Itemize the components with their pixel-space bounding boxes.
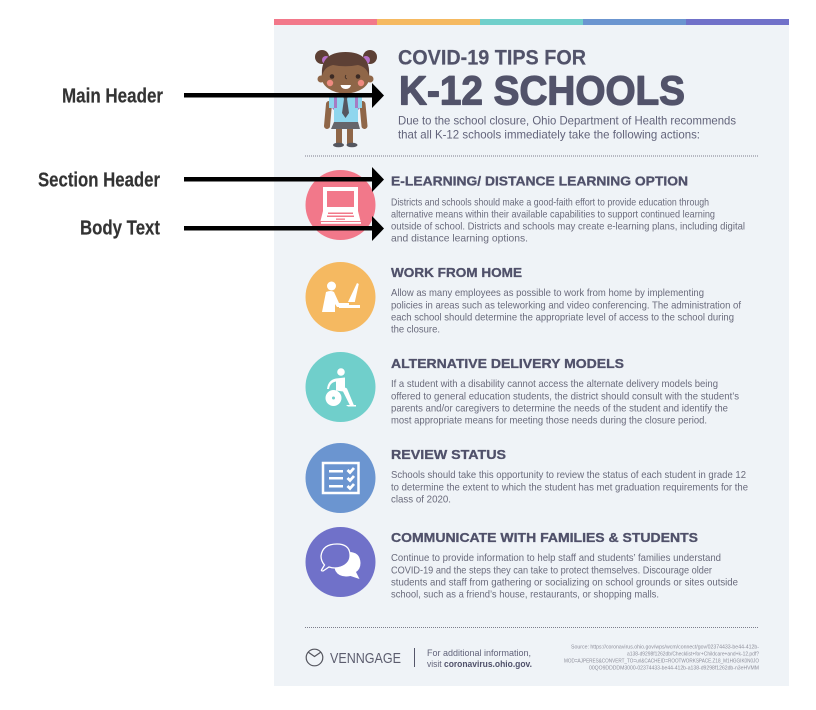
footer: source note: 00QO9DDDDM3000-02374433-be44-412b-a138-d9298f1262db-n3eHVMM	[589, 666, 759, 672]
label: Section Header: Section Header	[38, 168, 160, 192]
footer: additional information: visit coronavirus.ohio.gov.	[427, 659, 532, 670]
body text: COVID-19 and the steps they can take to protect themselves. Discourage older	[391, 564, 712, 576]
main title: K-12 Schools: K-12 SCHOOLS	[399, 68, 685, 114]
body text: parents and/or caregivers to determine the needs of the student and identify the	[391, 402, 728, 414]
footer: source note: a138-d9298f1262db/Checklist+for+Childcare+and+k-12.pdf?	[627, 652, 759, 658]
body text: and distance learning options.	[391, 232, 528, 244]
heading: WORK FROM HOME	[391, 265, 522, 280]
body text: Continue to provide information to help staff and students’ families understand	[391, 552, 721, 564]
body text: most appropriate means for meeting those needs during the closure period.	[391, 414, 707, 426]
footer: Venngage logo	[306, 649, 401, 667]
intro text	[398, 114, 736, 142]
body text: alternative means within their available capabilities to support continued learning	[391, 208, 715, 220]
body text: Districts and schools should make a good-faith effort to provide education through	[391, 196, 709, 208]
body text: the closure.	[391, 324, 440, 336]
section: review status	[306, 443, 748, 513]
footer: source note: Source: https://coronavirus.ohio.gov/wps/wcm/connect/gov/02374433-be44-412b-	[571, 645, 759, 651]
heading: ALTERNATIVE DELIVERY MODELS	[391, 356, 624, 371]
section: work from home	[306, 262, 741, 336]
section: alternative delivery models	[306, 352, 739, 426]
arrow: to section header	[184, 167, 384, 192]
top colour bar	[274, 19, 789, 25]
body text: class of 2020.	[391, 494, 451, 506]
body text: Allow as many employees as possible to work from home by implementing	[391, 287, 704, 299]
label: Body Text: Body Text	[80, 216, 160, 240]
body text: each school should determine the appropriate level of access to the school during	[391, 312, 734, 324]
section: e-learning	[306, 170, 745, 244]
body text: Schools should take this opportunity to review the status of each student in grade 12	[391, 469, 746, 481]
footer: additional information	[427, 648, 532, 670]
footer: Venngage logo: VENNGAGE	[330, 651, 401, 667]
body text	[391, 552, 738, 600]
body text	[391, 469, 748, 506]
body text: If a student with a disability cannot access the alternate delivery models being	[391, 378, 718, 390]
icon: schoolgirl illustration	[315, 50, 377, 147]
heading: COMMUNICATE WITH FAMILIES & STUDENTS	[391, 530, 698, 545]
body text: offered to general education students, the district should consult with the student’s	[391, 390, 739, 402]
icon: checklist	[306, 443, 376, 513]
body text	[391, 287, 741, 336]
arrow: to body text	[184, 216, 384, 241]
poster panel background	[274, 19, 789, 686]
footer: source note: MOD=AJPERES&CONVERT_TO=url&CACHEID=ROOTWORKSPACE.Z18_M1HGGIK0N0JO	[564, 659, 759, 665]
footer: additional information: For additional information,	[427, 648, 531, 659]
section: communicate with families and students	[306, 527, 738, 600]
icon: laptop	[306, 170, 376, 240]
body text: policies in areas such as teleworking and video conferencing. The administration of	[391, 300, 741, 312]
intro text: that all K-12 schools immediately take the following actions:	[398, 128, 700, 142]
body text: school, such as a friend’s house, restaurants, or shopping malls.	[391, 588, 659, 600]
heading: E-LEARNING/ DISTANCE LEARNING OPTION	[391, 174, 688, 188]
icon: speech bubbles	[306, 527, 376, 597]
body text: to determine the extent to which the student has met graduation requirements for the	[391, 482, 748, 494]
heading: REVIEW STATUS	[391, 447, 506, 462]
footer: source note	[564, 645, 759, 672]
title: COVID-19 Tips For: COVID-19 TIPS FOR	[398, 46, 586, 70]
body text	[391, 378, 739, 426]
body text: outside of school. Districts and schools may create e-learning plans, including digital	[391, 220, 745, 232]
body text	[391, 196, 745, 244]
icon: wheelchair user	[306, 352, 376, 422]
intro text: Due to the school closure, Ohio Department of Health recommends	[398, 114, 736, 128]
icon: person at computer	[306, 262, 376, 332]
label: Main Header: Main Header	[62, 84, 163, 108]
arrow: to main header	[184, 83, 384, 108]
body text: students and staff from gathering or socializing on school grounds or sites outside	[391, 576, 738, 588]
